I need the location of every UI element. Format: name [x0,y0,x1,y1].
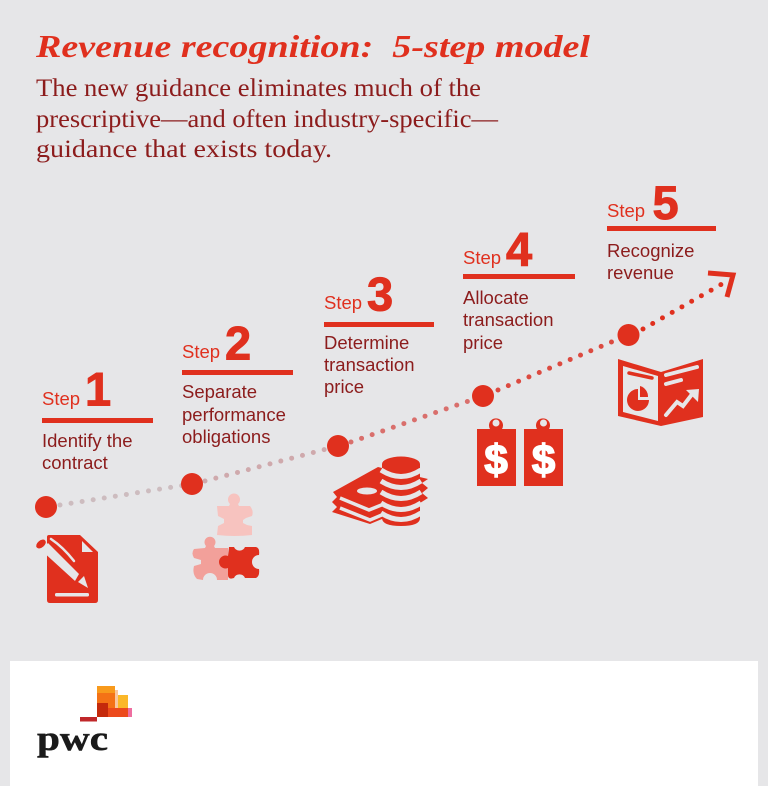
step 1: Identify the [42,430,133,451]
pwc logo: pwc [37,719,108,758]
puzzle piece: pink [192,537,228,580]
icon: price tags: $ [532,436,555,483]
step 5: 5 [652,176,679,229]
step 3: transaction [324,354,414,375]
step 1 [42,362,153,473]
step 5: revenue [607,262,674,283]
step 1: 1 [85,362,111,416]
pwc logo [37,686,132,758]
intro text [36,73,499,163]
step 4: Allocate [463,287,529,308]
footer panel [10,661,758,786]
puzzle piece: pale [217,494,253,536]
step 4: price [463,332,503,353]
step 1: Step [42,388,80,409]
step 3: Determine [324,332,409,353]
step 4 [463,222,575,353]
intro text: prescriptive—and often industry-specific— [36,104,499,133]
icon: contract document with pen [35,535,98,603]
step 4: Step [463,247,501,268]
step 5: Recognize [607,240,694,261]
icon: revenue report [618,359,703,426]
step 1: contract [42,452,108,473]
intro text: The new guidance eliminates much of the [36,73,481,102]
step 2: Separate [182,381,257,402]
step 4: transaction [463,309,554,330]
step 3: 3 [367,268,393,320]
step 5 [607,176,716,283]
step 3: price [324,376,364,397]
icon: price tags [477,418,563,486]
step 2: performance [182,404,286,425]
step 2 [182,316,293,447]
icon: puzzle pieces [192,494,259,580]
step 4: 4 [506,222,532,276]
node markers [35,324,640,518]
step 5: Step [607,200,645,221]
dotted growth path [60,284,722,505]
title: Revenue recognition: 5-step model [35,28,590,64]
step 2: obligations [182,426,270,447]
puzzle piece: red [219,547,259,579]
step 2: 2 [225,316,251,370]
intro text: guidance that exists today. [36,134,332,163]
step 2: Step [182,341,220,362]
icon: money and coins [332,456,428,526]
step 3 [324,268,434,397]
arrow head [708,273,733,297]
icon: price tags: $ [484,436,508,483]
step 3: Step [324,292,362,313]
